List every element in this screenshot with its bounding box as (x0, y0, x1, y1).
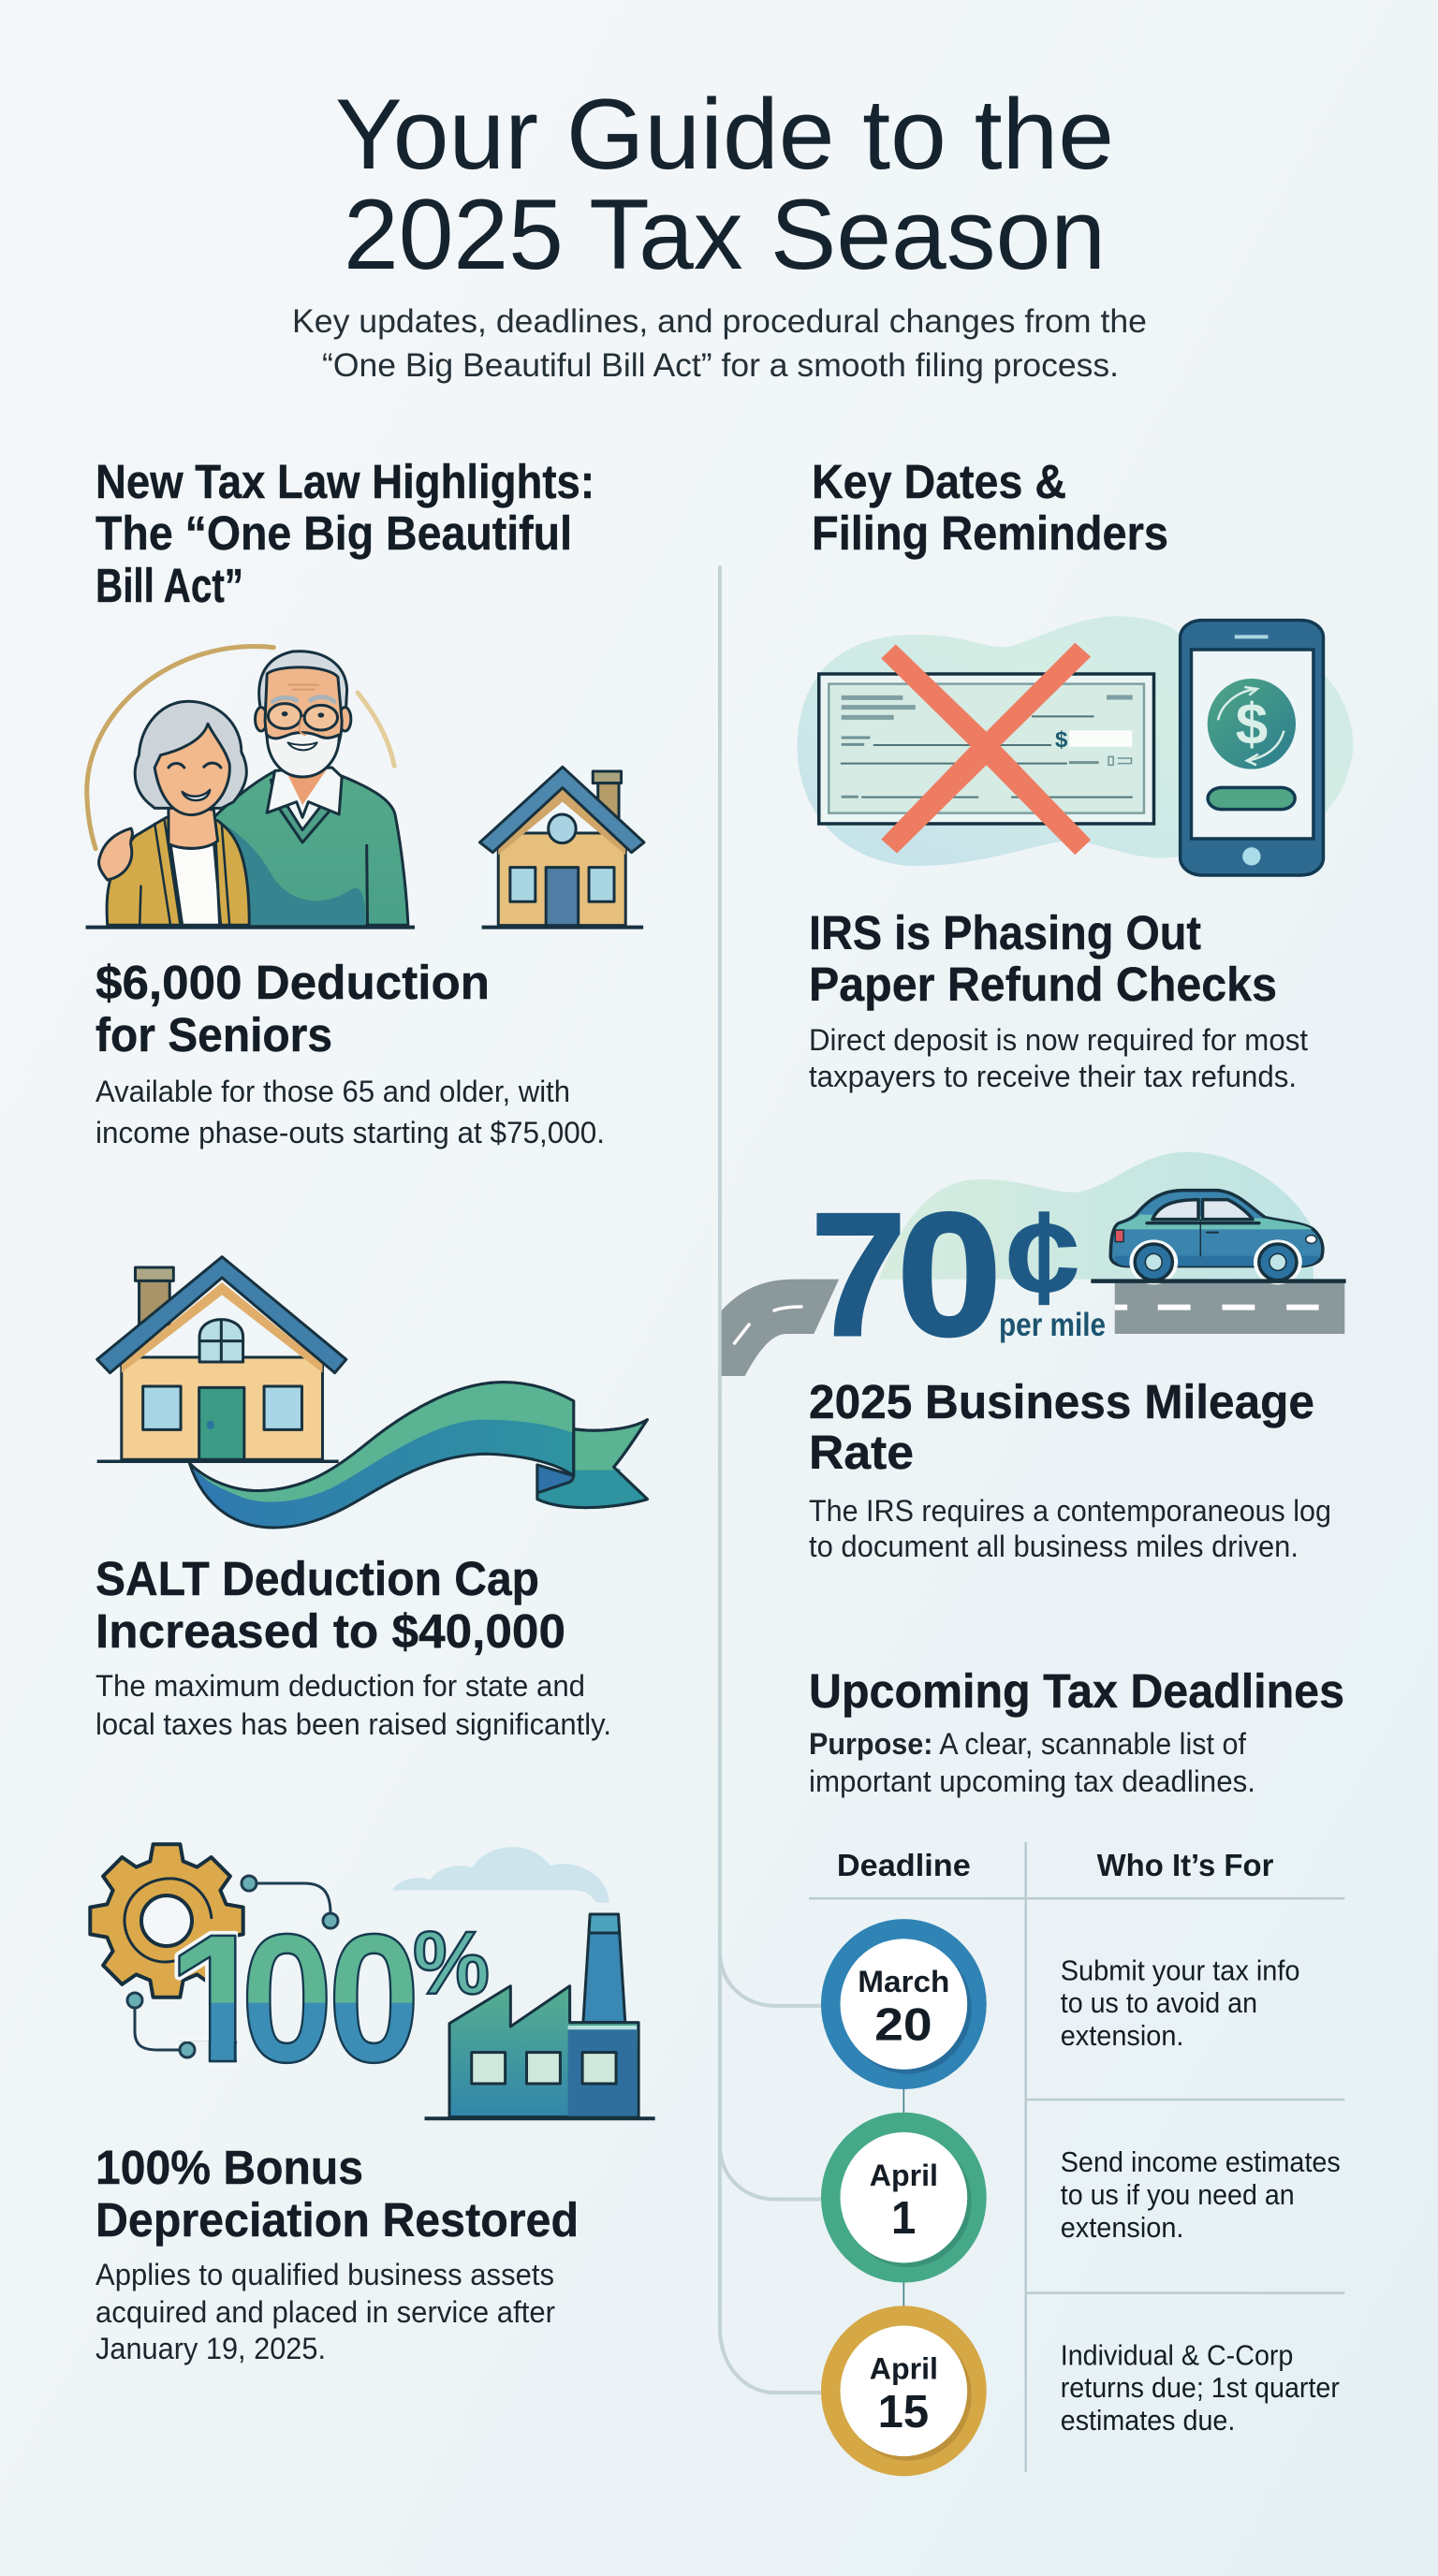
text block: SALT cap: Increased to $40,000 (95, 1604, 565, 1658)
timeline spine (720, 566, 821, 2393)
text block: bonus depreciation: Applies to qualified business assets (95, 2258, 554, 2291)
column headers: Who It’s For (1097, 1848, 1274, 1882)
heading: new tax law highlights: New Tax Law Highlights: (95, 455, 594, 508)
row text: March 20: to us to avoid an (1061, 1988, 1257, 2019)
text block: mileage rate: to document all business miles driven. (809, 1530, 1299, 1563)
subtitle: “One Big Beautiful Bill Act” for a smooth filing process. (322, 347, 1119, 384)
icon: small house (479, 767, 644, 926)
icon: ribbon (189, 1383, 647, 1528)
road edge (1091, 1279, 1346, 1283)
big number: 70: 0 (897, 1177, 1002, 1372)
row text: April 15 (1061, 2340, 1340, 2437)
text block: mileage rate: 2025 Business Mileage (809, 1375, 1314, 1428)
text block: seniors deduction: $6,000 Deduction (95, 956, 490, 1009)
text block: seniors deduction: income phase-outs starting at $75,000. (95, 1116, 605, 1149)
icon: red X (881, 643, 1091, 855)
text block: paper refund checks: Direct deposit is now required for most (809, 1023, 1308, 1057)
deadline: April 1: April (870, 2158, 938, 2192)
road dashes (735, 1307, 801, 1343)
heading: key dates (812, 455, 1168, 560)
deadline: April 15: 15 (878, 2387, 929, 2437)
text block: SALT cap: SALT Deduction Cap (95, 1552, 539, 1605)
title: 2025 Tax Season (344, 178, 1106, 290)
big number: 70: 7 (811, 1177, 906, 1372)
text block: bonus depreciation: 100% Bonus (95, 2141, 363, 2194)
title: Your Guide to the (335, 78, 1114, 190)
text block: mileage rate: Rate (809, 1426, 914, 1479)
icon: senior woman (99, 701, 249, 925)
text block: mileage rate (809, 1375, 1331, 1563)
cloud (392, 1847, 609, 1903)
road dashes (1115, 1305, 1319, 1310)
illustration: 70 cents per mile (722, 1152, 1346, 1376)
text block: SALT cap (95, 1552, 611, 1741)
ground line (97, 1460, 339, 1463)
big number: 100: 1 (167, 1896, 270, 2100)
text block: seniors deduction: for Seniors (95, 1008, 332, 1061)
column headers (837, 1848, 1274, 1882)
icon: factory (392, 1847, 655, 2118)
text block: bonus depreciation: acquired and placed in service after (95, 2295, 555, 2329)
row text: April 15: Individual & C-Corp (1061, 2340, 1293, 2371)
deadline: March 20 (821, 1919, 987, 2089)
chimney (583, 1914, 625, 2023)
icon: gear (90, 1844, 243, 1998)
icon: phone (1181, 621, 1323, 875)
illustration: gear, 100 percent, factory (90, 1844, 655, 2118)
icon: paper check (819, 674, 1153, 824)
text block: upcoming tax deadlines: important upcoming tax deadlines. (809, 1764, 1255, 1798)
title (335, 78, 1114, 290)
heading: new tax law highlights: The “One Big Beautiful (95, 506, 572, 560)
text block: upcoming tax deadlines: Purpose: A clear, scannable list of (809, 1727, 1246, 1761)
building (449, 1986, 638, 2117)
text block: bonus depreciation: January 19, 2025. (95, 2332, 326, 2365)
background blob (798, 616, 1353, 866)
subtitle: Key updates, deadlines, and procedural changes from the (292, 303, 1147, 340)
illustration: check and phone (798, 616, 1353, 875)
row text: April 15: returns due; 1st quarter (1061, 2373, 1340, 2404)
table grid (809, 1841, 1344, 2472)
heading: key dates: Key Dates & (812, 455, 1066, 508)
icon: car (1110, 1191, 1323, 1284)
background blob (879, 1152, 1313, 1280)
row text: April 1: to us if you need an (1061, 2180, 1295, 2211)
deadline: April 15 (821, 2305, 987, 2476)
icon: straight road (1115, 1283, 1344, 1334)
column headers: Deadline (837, 1848, 971, 1882)
row text: April 1 (1061, 2147, 1341, 2244)
row text: March 20: Submit your tax info (1061, 1955, 1300, 1986)
deadline: March 20: March (858, 1965, 949, 1998)
deadline: March 20: 20 (874, 2000, 932, 2051)
check dollar sign: $ (1055, 727, 1068, 753)
deadline: April 15: April (870, 2351, 938, 2386)
text block: upcoming tax deadlines (809, 1664, 1344, 1798)
row text: April 15: estimates due. (1061, 2406, 1235, 2437)
text block: upcoming tax deadlines: Upcoming Tax Deadlines (809, 1664, 1344, 1718)
deadline: April 1 (821, 2113, 987, 2283)
ground line (425, 2116, 655, 2120)
text block: SALT cap: local taxes has been raised significantly. (95, 1707, 611, 1741)
timeline connectors (902, 2084, 905, 2311)
text block: bonus depreciation: Depreciation Restored (95, 2193, 579, 2247)
icon: senior man (213, 651, 408, 925)
subtitle (292, 303, 1147, 384)
big number: 100: 0 (328, 1896, 420, 2100)
illustration: house and ribbon (97, 1257, 647, 1528)
deadline: April 1: 1 (891, 2194, 916, 2244)
phone dollar sign: $ (1236, 693, 1268, 757)
text block: paper refund checks: taxpayers to receive their tax refunds. (809, 1060, 1297, 1093)
row text: April 1: extension. (1061, 2213, 1183, 2244)
text block: paper refund checks: Paper Refund Checks (809, 958, 1277, 1011)
text block: bonus depreciation (95, 2141, 579, 2365)
text block: SALT cap: The maximum deduction for state and (95, 1669, 585, 1703)
heading: new tax law highlights (95, 455, 594, 612)
cent sign: ¢ (1005, 1183, 1080, 1332)
text block: seniors deduction: Available for those 65 and older, with (95, 1075, 570, 1108)
text block: paper refund checks: IRS is Phasing Out (809, 906, 1201, 959)
big number: 100: 0 (241, 1896, 333, 2100)
row text: March 20 (1061, 1955, 1300, 2052)
big number: 100 (174, 1930, 415, 2065)
icon: house (97, 1257, 346, 1459)
text block: seniors deduction (95, 956, 605, 1149)
row text: April 1: Send income estimates (1061, 2147, 1341, 2178)
big number: 70 (811, 1177, 1002, 1372)
ground line (86, 926, 643, 929)
big number: 100: 1 (167, 1896, 270, 2100)
per mile label: per mile (999, 1307, 1106, 1343)
heading: key dates: Filing Reminders (812, 506, 1168, 560)
text block: mileage rate: The IRS requires a contemporaneous log (809, 1494, 1331, 1528)
icon: gold arc (87, 647, 394, 849)
illustration: seniors and house (86, 647, 644, 928)
heading: new tax law highlights: Bill Act” (95, 559, 243, 612)
icon: connector circuits (127, 1876, 338, 2057)
percent sign: % (413, 1913, 490, 2013)
text block: paper refund checks (809, 906, 1308, 1093)
row text: March 20: extension. (1061, 2021, 1183, 2052)
deadlines table (809, 1841, 1344, 2476)
icon: winding road (722, 1280, 839, 1376)
